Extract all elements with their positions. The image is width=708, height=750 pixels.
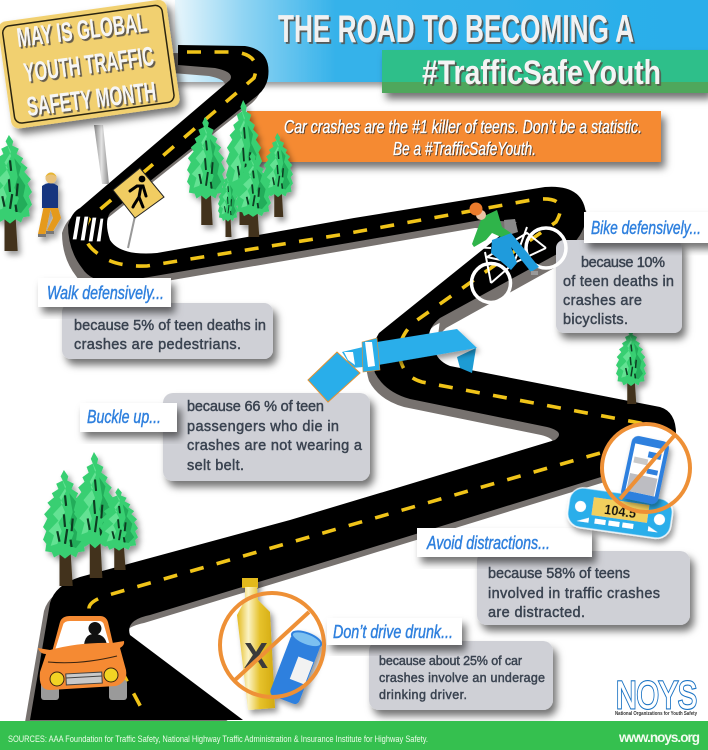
stat box: drunk: because about 25% of car	[379, 654, 522, 668]
label: distractions	[417, 528, 592, 557]
logo strapline: National Organizations for Youth Safety	[615, 711, 697, 717]
label: buckle	[80, 403, 177, 432]
icon: seat belt	[308, 329, 477, 402]
radio frequency: 104.5	[603, 501, 637, 521]
hashtag banner	[382, 50, 708, 93]
icon: car	[38, 616, 127, 700]
stat box: drunk: drinking driver.	[379, 688, 467, 702]
stat box: distractions	[477, 551, 690, 625]
tree: left edge	[0, 135, 32, 251]
panel: buckle up	[80, 393, 370, 481]
header band	[175, 0, 708, 82]
crosswalk	[72, 216, 104, 242]
label: walk	[38, 278, 171, 307]
stat box: bike: of teen deaths in	[563, 274, 674, 290]
stat box: buckle	[163, 393, 370, 481]
sign text: SAFETY MONTH	[25, 76, 158, 122]
stat box: bike: crashes are	[563, 293, 642, 309]
sign text: YOUTH TRAFFIC	[22, 41, 156, 88]
panel: avoid distractions	[417, 528, 690, 625]
stat box: walk: crashes are pedestrians.	[74, 337, 241, 353]
tree group: centre	[187, 100, 293, 237]
hashtag heading: #TrafficSafeYouth	[422, 54, 661, 92]
icon: pedestrian crossing sign	[113, 168, 164, 248]
panel: intro message	[247, 111, 661, 162]
icon: car radio	[566, 424, 690, 540]
stat box: buckle: because 66 % of teen	[187, 399, 324, 415]
label: buckle: Buckle up...	[87, 407, 161, 427]
stat box: distractions: because 58% of teens	[488, 566, 630, 582]
stat box: distractions: are distracted.	[488, 605, 585, 621]
sign text	[15, 7, 158, 122]
stat box: distractions: involved in traffic crashes	[488, 586, 660, 602]
icon: pedestrian	[38, 172, 61, 237]
stat box: buckle: selt belt.	[187, 458, 244, 474]
stat box: drunk: crashes involve an underage	[379, 671, 545, 685]
yellow month sign	[0, 0, 181, 129]
icon: no alcohol	[220, 578, 324, 710]
stat box: walk	[62, 303, 273, 359]
stat box: bike	[556, 240, 682, 333]
stat box: bike: bicyclists.	[563, 312, 628, 328]
sources: SOURCES: AAA Foundation for Traffic Safety, National Highway Traffic Administration & Insurance Institute for Highway Safety.	[8, 734, 428, 745]
website: www.noys.org	[618, 730, 700, 745]
sign pole	[94, 125, 109, 184]
intro text: Be a #TrafficSafeYouth.	[393, 139, 536, 159]
driver	[84, 622, 107, 646]
label: bike	[584, 212, 708, 243]
label: distractions: Avoid distractions...	[426, 533, 550, 553]
stat box: buckle: passengers who die in	[187, 419, 339, 435]
stat box: drunk	[369, 641, 553, 710]
tree: right	[616, 328, 646, 404]
icon: no phone	[602, 424, 690, 512]
icon: cyclist	[470, 202, 566, 302]
footer bar	[0, 721, 708, 750]
stat box: bike: because 10%	[581, 255, 665, 271]
tree group: lower left	[43, 452, 138, 586]
stat box: walk: because 5% of teen deaths in	[74, 318, 266, 334]
panel: walk defensively	[38, 278, 273, 359]
road centre line	[85, 52, 650, 711]
label: drunk: Don’t drive drunk...	[333, 622, 453, 642]
intro text	[284, 117, 642, 159]
panel: don't drive drunk	[327, 618, 553, 710]
label: walk: Walk defensively...	[47, 283, 164, 303]
panel: bike defensively	[556, 212, 708, 333]
bottle label: X	[244, 635, 268, 676]
stat box: buckle: crashes are not wearing a	[187, 438, 363, 454]
label: drunk	[327, 618, 462, 645]
